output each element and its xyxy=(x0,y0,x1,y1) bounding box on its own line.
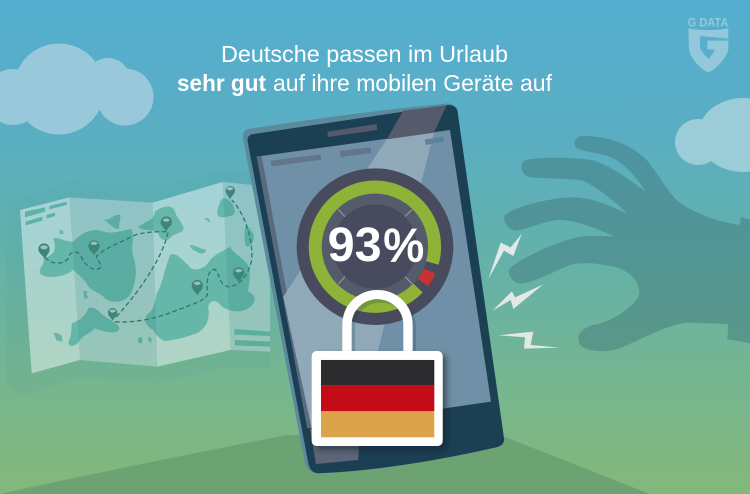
gauge red segment xyxy=(423,271,430,283)
phone speaker xyxy=(327,124,377,137)
map pins xyxy=(38,186,244,321)
lightning bolts xyxy=(488,234,559,349)
map fold shading xyxy=(69,182,270,367)
screen glare xyxy=(283,133,434,428)
map islands xyxy=(40,198,255,346)
padlock xyxy=(312,295,443,446)
logo: G DATA xyxy=(688,16,729,73)
title: auf ihre mobilen Geräte auf xyxy=(273,70,553,96)
map legend bars xyxy=(25,202,270,347)
smartphone xyxy=(243,103,504,473)
title: sehr gut xyxy=(177,70,266,96)
gauge number xyxy=(328,218,424,272)
cloud left xyxy=(0,44,154,134)
screen header bars xyxy=(271,137,444,166)
title: Deutsche passen im Urlaub xyxy=(221,41,508,67)
german flag xyxy=(321,360,434,437)
cloud right xyxy=(675,98,750,172)
folded map xyxy=(7,172,270,397)
gauge number: % xyxy=(383,219,424,271)
gauge green arc xyxy=(315,187,435,306)
phone screen xyxy=(257,130,491,428)
logo: G DATA: G DATA xyxy=(688,16,729,30)
title xyxy=(177,41,553,96)
hand shadow xyxy=(488,136,750,351)
map routes xyxy=(45,200,252,322)
gauge 93% xyxy=(297,168,453,325)
ground hill xyxy=(0,435,650,494)
gauge number: 93 xyxy=(328,218,382,272)
